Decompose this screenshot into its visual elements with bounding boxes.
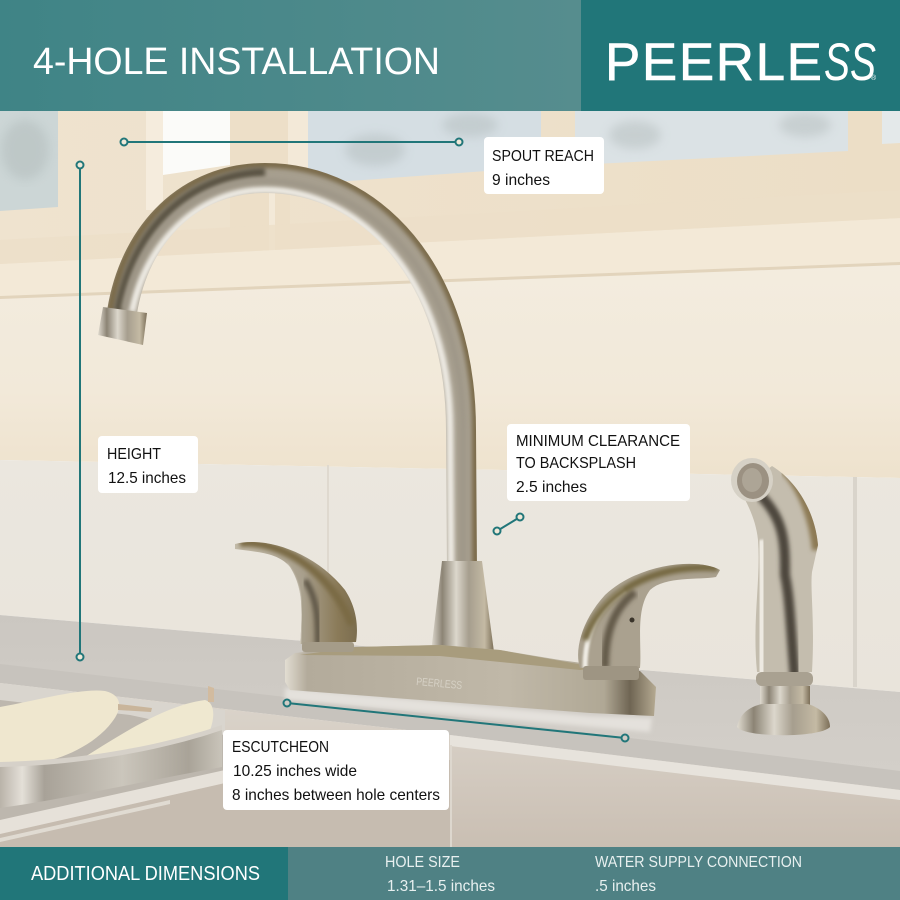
footer: additional dimensions heading [0, 847, 288, 900]
window panes [0, 100, 900, 260]
label: minimum clearance: TO BACKSPLASH [516, 455, 636, 472]
title: 4-HOLE INSTALLATION [33, 41, 440, 83]
dimension: escutcheon [284, 700, 628, 742]
logo panel: ® [871, 74, 877, 82]
label: spout reach: SPOUT REACH [492, 148, 594, 165]
right handle collar [583, 666, 639, 680]
left handle [235, 542, 357, 644]
footer: values: .5 inches [595, 878, 656, 895]
faucet [90, 150, 830, 735]
counter reflection below plate [285, 688, 652, 732]
label: spout reach: 9 inches [492, 172, 550, 189]
window wall [0, 0, 900, 300]
footer: values: WATER SUPPLY CONNECTION [595, 854, 802, 871]
label: escutcheon: 8 inches between hole centers [232, 787, 440, 804]
label: height [98, 436, 198, 493]
label: minimum clearance: 2.5 inches [516, 479, 587, 496]
logo panel: SS [824, 33, 876, 92]
label: escutcheon: 10.25 inches wide [233, 763, 357, 780]
footer: values: HOLE SIZE [385, 854, 460, 871]
bowl [0, 727, 222, 808]
pears in bowl [0, 686, 222, 808]
title band [0, 0, 581, 111]
aerator [98, 307, 147, 345]
logo panel: PEERLE [605, 33, 822, 92]
window sill [0, 218, 900, 298]
backsplash tile [0, 460, 900, 692]
dimension: height [76, 162, 84, 660]
countertop [0, 615, 900, 790]
spray head [731, 458, 830, 735]
label: height: 12.5 inches [108, 470, 186, 487]
label: escutcheon: ESCUTCHEON [232, 739, 329, 756]
logo panel [581, 0, 900, 111]
left handle collar [302, 642, 354, 652]
label: minimum clearance: MINIMUM CLEARANCE [516, 433, 680, 450]
footer: additional dimensions heading: ADDITIONAL DIMENSIONS [31, 863, 260, 885]
footer: values: 1.31–1.5 inches [387, 878, 495, 895]
label: minimum clearance [507, 424, 690, 501]
wood panel [0, 262, 900, 478]
escutcheon plate: PEERLESS [416, 676, 463, 692]
right handle [578, 564, 720, 668]
spout base [431, 561, 494, 652]
footer: values [288, 847, 900, 900]
dimension: spout reach [120, 138, 462, 146]
label: escutcheon [223, 730, 449, 810]
label: height: HEIGHT [107, 446, 161, 463]
sink [0, 683, 900, 850]
spout [108, 163, 477, 561]
dimension: clearance [494, 514, 524, 534]
label: spout reach [484, 137, 604, 194]
escutcheon plate [285, 645, 656, 716]
